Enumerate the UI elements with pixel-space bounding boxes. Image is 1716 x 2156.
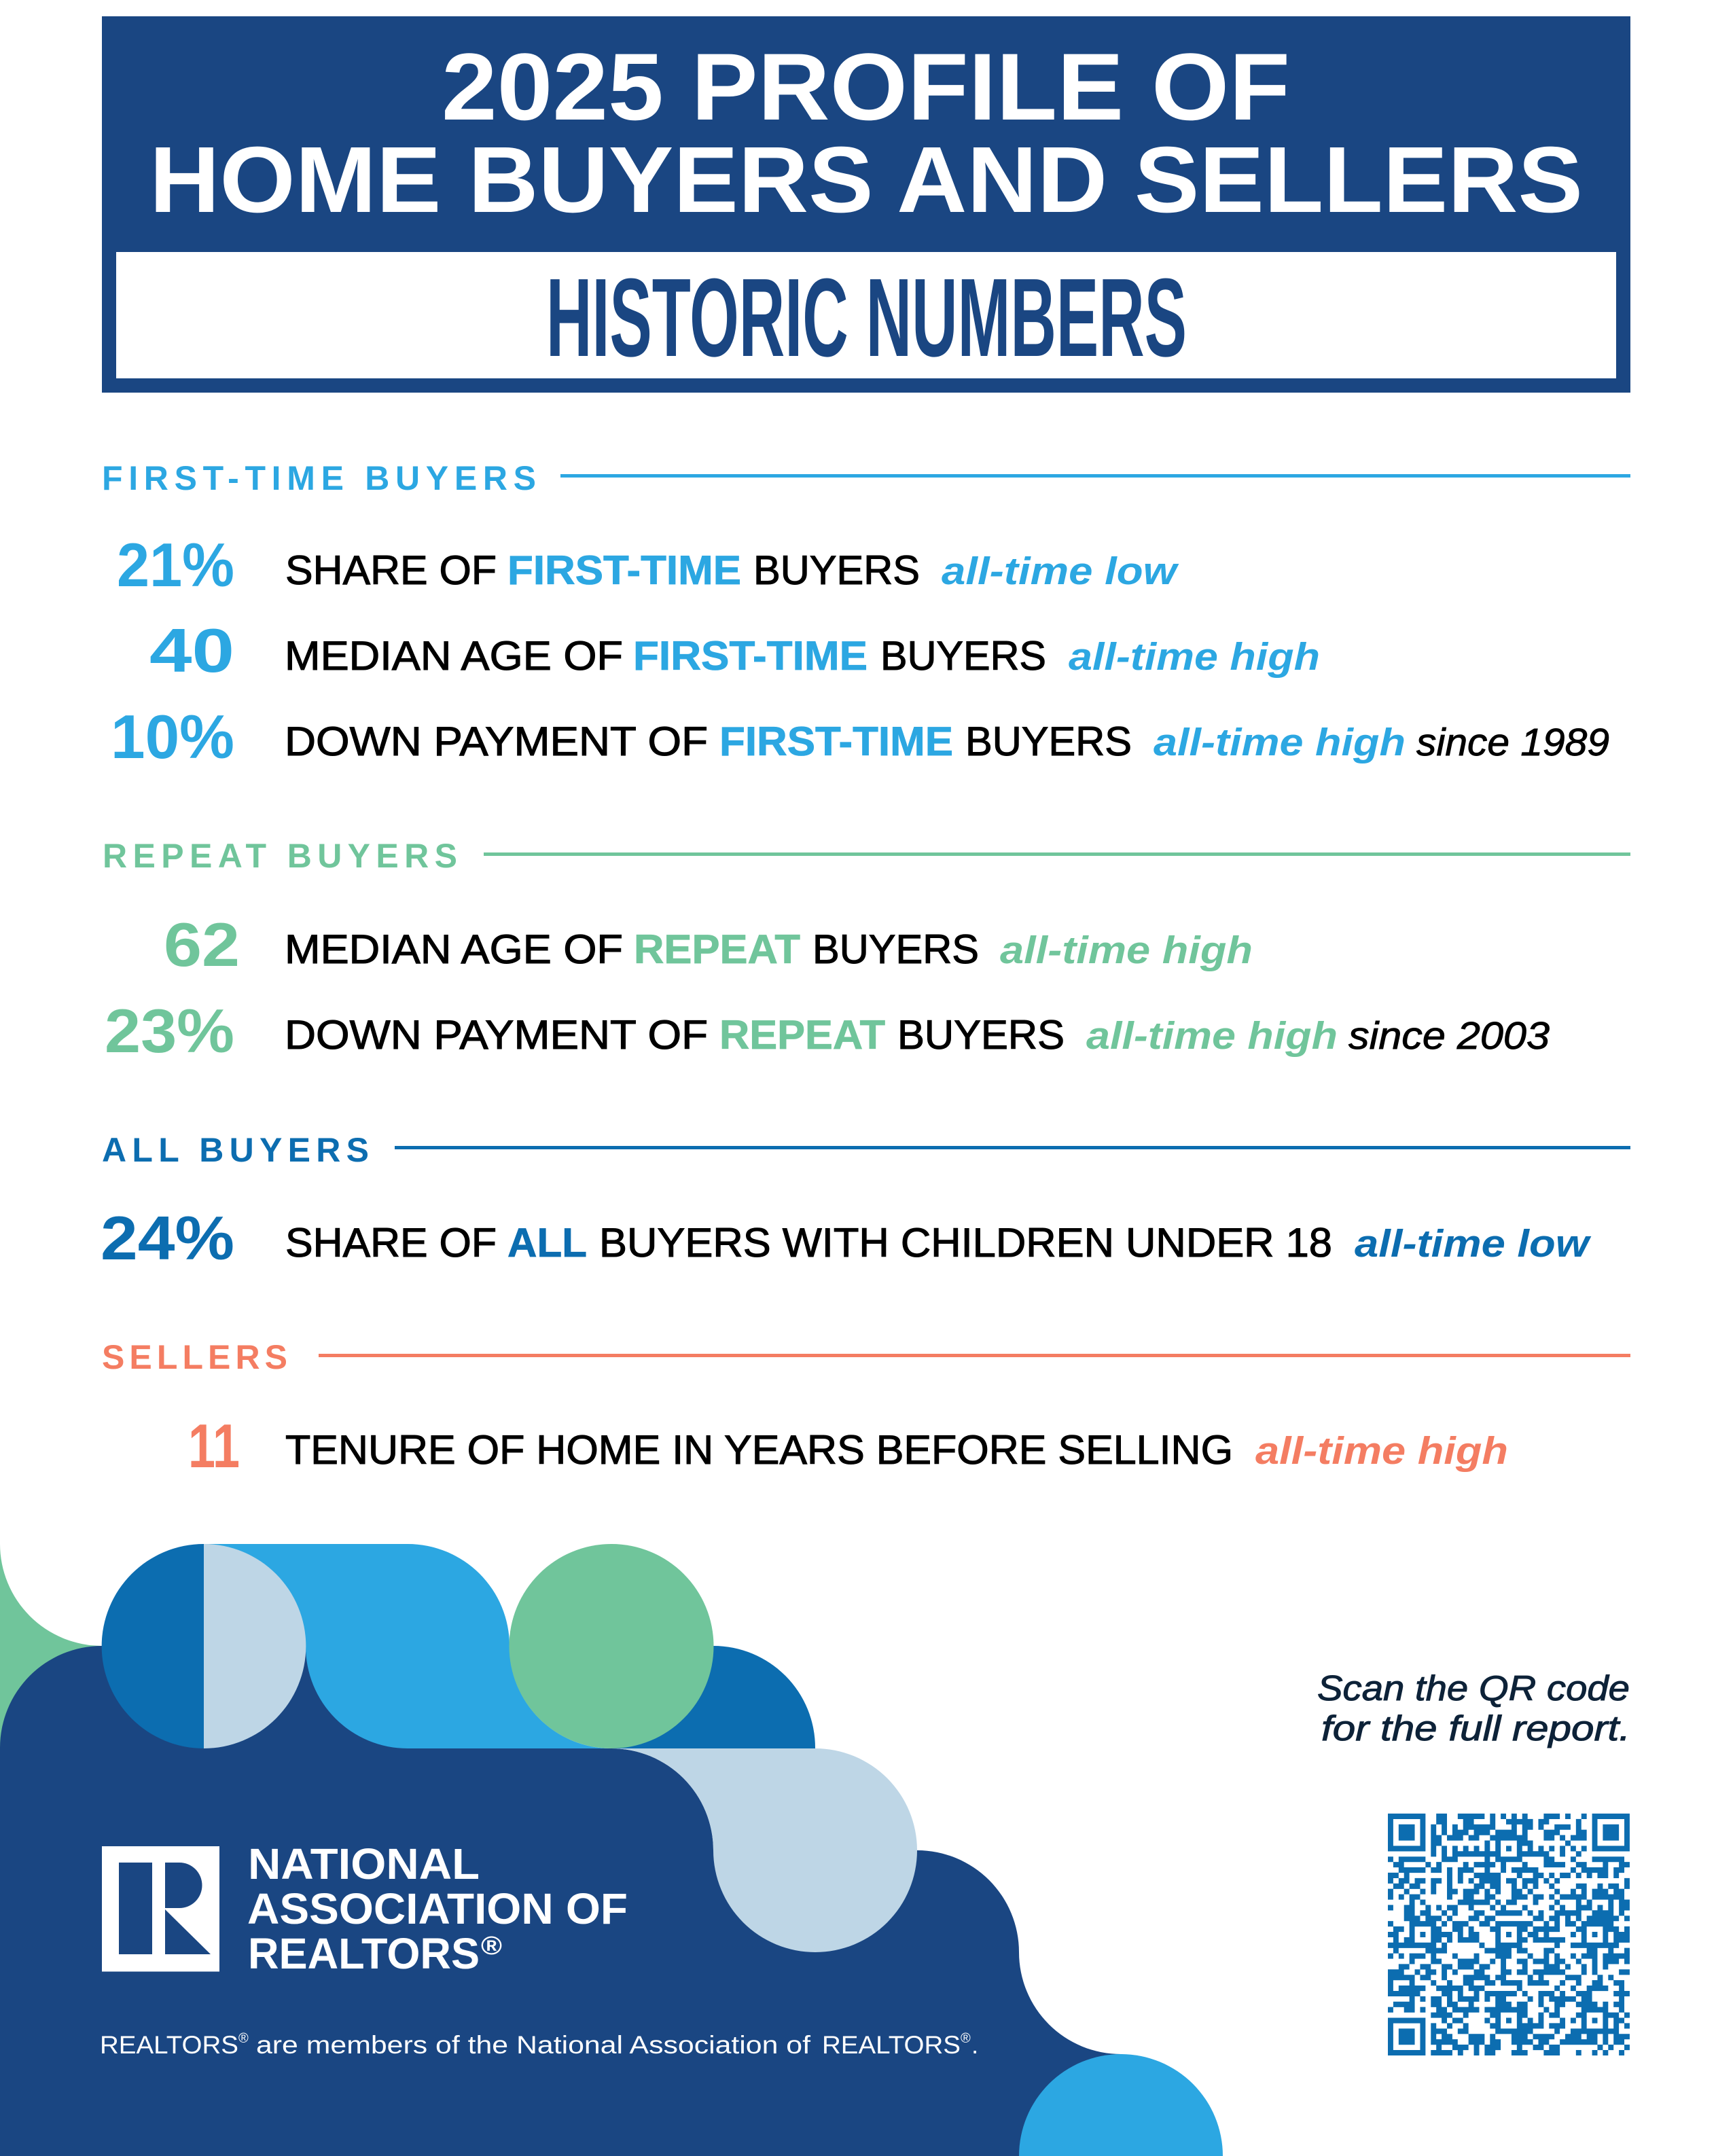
- stat description: REPEAT: [634, 927, 800, 972]
- stat description: SHARE OF: [285, 547, 497, 593]
- section heading: first-time buyers: FIRST-TIME BUYERS: [102, 459, 536, 497]
- section: sellers: [102, 1338, 1630, 1481]
- shape: bottom blue semicircle: [1019, 2054, 1223, 2156]
- section: repeat buyers: [103, 837, 1630, 1066]
- stat row: median age 40: [149, 617, 1320, 685]
- footnote: REALTORS: [100, 2031, 238, 2059]
- stat description: all-time high: [1086, 1014, 1338, 1058]
- stat description: MEDIAN AGE OF: [285, 633, 623, 679]
- section: first-time buyers: [102, 459, 1630, 772]
- stat description: FIRST-TIME: [507, 547, 741, 593]
- logo wordmark: [247, 1839, 628, 1978]
- stat number: 11: 11: [188, 1412, 240, 1481]
- shape: green corner: [0, 1544, 102, 1748]
- stat description: BUYERS: [897, 1012, 1065, 1058]
- shape: green circle: [510, 1544, 713, 1748]
- subtitle box: historic numbers: [109, 245, 1624, 386]
- title line 2: HOME BUYERS AND SELLERS: [149, 128, 1583, 232]
- stat description: BUYERS WITH CHILDREN UNDER 18: [599, 1220, 1332, 1265]
- section heading: all buyers: ALL BUYERS: [102, 1131, 369, 1169]
- stat description: REPEAT: [719, 1012, 885, 1058]
- header: title banner: [102, 16, 1630, 238]
- stat description: BUYERS: [812, 927, 979, 972]
- subtitle text: HISTORIC NUMBERS: [546, 255, 1187, 380]
- decorative footer shapes: [0, 1544, 1223, 2156]
- stat description: FIRST-TIME: [719, 719, 953, 764]
- stat description: DOWN PAYMENT OF: [285, 719, 708, 764]
- stat row: 21% share of first-time buyers: [117, 531, 1179, 600]
- section heading: sellers: SELLERS: [102, 1338, 287, 1376]
- QR code: [1388, 1816, 1630, 2053]
- stat row: children under 18 24%: [101, 1204, 1592, 1273]
- stat description: SHARE OF: [285, 1220, 497, 1265]
- stat description: all-time high: [1255, 1429, 1508, 1473]
- stat description: since 2003: [1348, 1014, 1550, 1058]
- stat description: TENURE OF HOME IN YEARS BEFORE SELLING: [285, 1427, 1233, 1473]
- stat description: all-time high: [1154, 721, 1406, 764]
- stat description: ALL: [507, 1220, 587, 1265]
- stat description: [285, 927, 1253, 972]
- stat description: since 1989: [1416, 721, 1609, 764]
- title line 1: 2025 PROFILE OF: [442, 33, 1290, 140]
- stat number: 62: 62: [164, 911, 240, 980]
- stat number: 21%: 21%: [117, 531, 234, 600]
- stat number: 40: 40: [149, 617, 234, 685]
- stat row: tenure 11: [188, 1412, 1508, 1481]
- footnote: [100, 2031, 978, 2059]
- footnote: ®: [238, 2031, 249, 2046]
- QR prompt text: [1317, 1669, 1630, 1748]
- stat description: BUYERS: [753, 547, 920, 593]
- stat description: [285, 1220, 1592, 1265]
- shape: navy background: [0, 1646, 1121, 2156]
- stat description: MEDIAN AGE OF: [285, 927, 623, 972]
- stat description: BUYERS: [880, 633, 1046, 679]
- stat description: all-time low: [942, 550, 1179, 593]
- logo wordmark: ASSOCIATION OF: [247, 1884, 628, 1933]
- stat description: [285, 719, 1609, 764]
- footnote: .: [971, 2031, 978, 2059]
- icon: R block mark: [102, 1846, 219, 1971]
- stat description: FIRST-TIME: [633, 633, 868, 679]
- stat number: 23%: 23%: [105, 997, 234, 1066]
- stat row: down payment 23%: [105, 997, 1550, 1066]
- logo wordmark: REALTORS: [248, 1929, 480, 1978]
- shape: dark blue quarter: [611, 1646, 815, 1748]
- stat description: DOWN PAYMENT OF: [285, 1012, 708, 1058]
- section: all buyers: [101, 1131, 1630, 1273]
- stat description: all-time low: [1355, 1222, 1592, 1265]
- section heading: repeat buyers: REPEAT BUYERS: [103, 837, 457, 875]
- footnote: are members of the National Association of: [256, 2031, 811, 2059]
- stat description: [285, 633, 1320, 679]
- logo wordmark: ®: [481, 1932, 502, 1960]
- shape: light blue wave: [611, 1748, 917, 1952]
- stat row: down payment 10%: [111, 703, 1609, 772]
- logo wordmark: NATIONAL: [248, 1839, 480, 1888]
- QR prompt text: for the full report.: [1321, 1709, 1630, 1748]
- stat description: [285, 1012, 1550, 1058]
- logo: National Association of REALTORS: [102, 1839, 628, 1978]
- stat description: all-time high: [1069, 635, 1320, 679]
- stat description: BUYERS: [965, 719, 1132, 764]
- stat number: 10%: 10%: [111, 703, 234, 772]
- shape: sky blue wave: [204, 1544, 611, 1748]
- shape: split circle: [102, 1544, 306, 1748]
- stat number: 24%: 24%: [101, 1204, 234, 1273]
- footnote: ®: [961, 2031, 971, 2046]
- stat description: [285, 547, 1179, 593]
- stat row: median age 62: [164, 911, 1253, 980]
- stat description: all-time high: [1000, 929, 1253, 972]
- QR prompt text: Scan the QR code: [1317, 1669, 1630, 1708]
- footnote: REALTORS: [822, 2031, 961, 2059]
